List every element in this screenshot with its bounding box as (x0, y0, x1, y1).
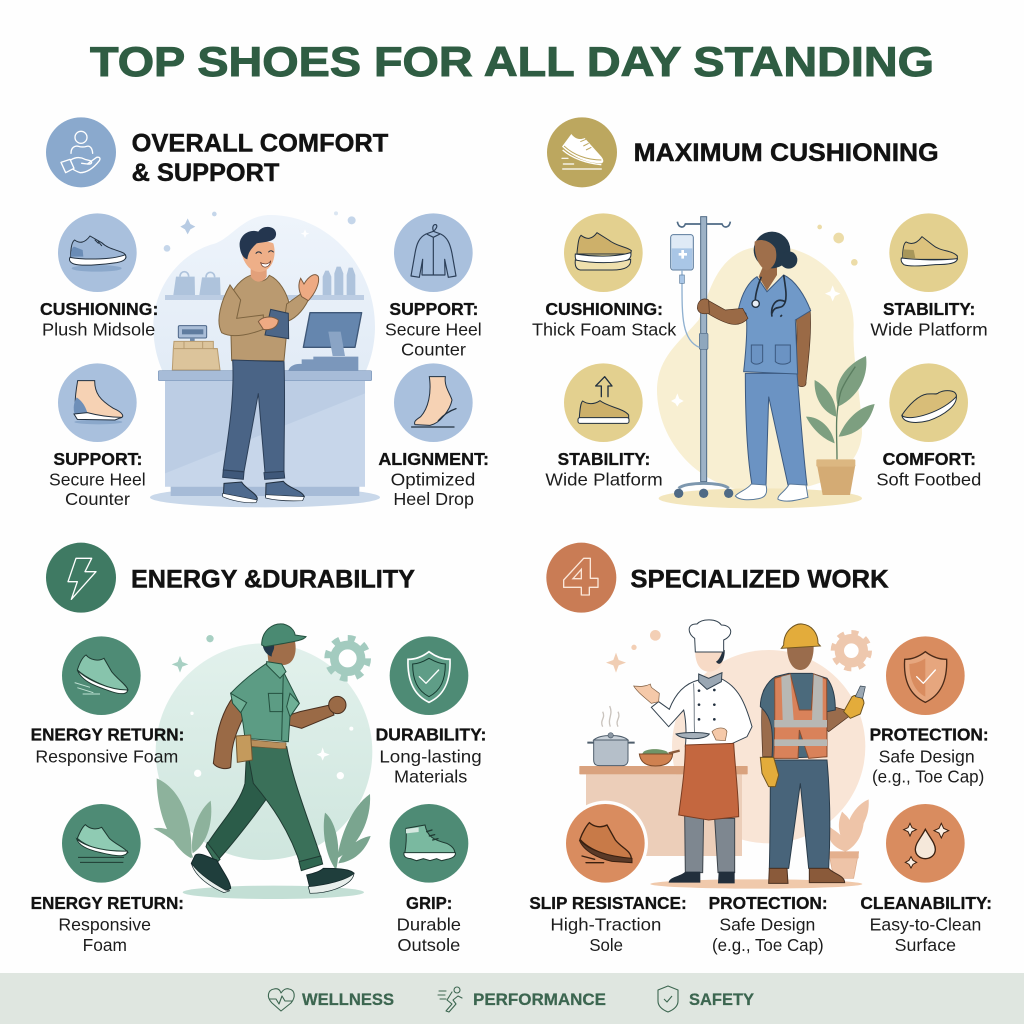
illustration: shop worker at counter (150, 211, 380, 507)
label: alignment: Optimized (391, 470, 475, 490)
label: durability: Long-lasting (379, 746, 482, 766)
label: support, left: SUPPORT: (53, 449, 142, 469)
label: protection, center: (e.g., Toe Cap) (712, 935, 824, 955)
label: protection: PROTECTION: (870, 725, 989, 745)
heading: ENERGY &DURABILITY (131, 565, 415, 593)
label: cleanability (860, 893, 992, 955)
icon: shield (658, 986, 678, 1012)
label: support, left: Secure Heel (49, 470, 146, 490)
panel: overall comfort and support (40, 117, 489, 509)
label: cushioning: CUSHIONING: (545, 299, 663, 319)
label: slip resistance: High-Traction (550, 915, 661, 935)
heading (132, 130, 389, 187)
heading: OVERALL COMFORT (132, 130, 389, 158)
label: cleanability: CLEANABILITY: (860, 893, 992, 913)
footer label: wellness: WELLNESS (302, 990, 394, 1009)
icon: plush midsole shoe (58, 213, 137, 292)
label: stability, left: Wide Platform (545, 470, 663, 490)
icon: wide platform shoe with arrow (564, 363, 643, 442)
label: energy return: Responsive Foam (35, 746, 178, 766)
illustration: walking worker (153, 624, 372, 899)
label: stability, left (545, 449, 663, 490)
label: stability: STABILITY: (883, 299, 975, 319)
icon: heel counter foot (58, 363, 137, 442)
icon: jacket on hanger (394, 213, 473, 292)
illustration: chef and construction worker (579, 620, 869, 889)
icon: person on open hand (46, 117, 116, 187)
label: support: Secure Heel (385, 320, 482, 340)
label: comfort: Soft Footbed (876, 470, 981, 490)
label: protection: (e.g., Toe Cap) (872, 767, 984, 787)
icon: slip resistant shoe (563, 801, 648, 886)
illustration: nurse with IV stand and plant (657, 217, 875, 508)
label: slip resistance: Sole (589, 935, 623, 955)
icon: cushioned running shoe (547, 117, 617, 187)
label: protection, center: Safe Design (719, 915, 815, 935)
label: support: Counter (401, 339, 466, 359)
label: cleanability: Easy-to-Clean (870, 915, 981, 935)
label: stability: Wide Platform (870, 320, 988, 340)
label: grip (397, 893, 461, 955)
footer label: safety: SAFETY (689, 990, 755, 1009)
label: energy return, lower: Foam (83, 935, 127, 955)
icon: heel drop foot (394, 363, 473, 442)
icon: heart rate (268, 989, 294, 1011)
label: cleanability: Surface (895, 935, 956, 955)
footer band (0, 973, 1024, 1024)
label: stability (870, 299, 988, 340)
label: cushioning: CUSHIONING: (40, 299, 158, 319)
icon: number four (546, 543, 616, 613)
label: support (385, 299, 482, 359)
label: cushioning (532, 299, 677, 340)
label: alignment: Heel Drop (393, 489, 474, 509)
icon: thick foam shoe (564, 213, 643, 292)
icon: clean drop with sparkles (886, 804, 965, 883)
icon: lightning bolt (46, 543, 116, 613)
heading: & SUPPORT (132, 159, 280, 187)
label: cushioning: Plush Midsole (42, 320, 155, 340)
label: grip: Outsole (397, 935, 460, 955)
icon: runner (438, 987, 462, 1012)
label: protection (870, 725, 989, 787)
label: slip resistance: SLIP RESISTANCE: (529, 893, 687, 913)
label: cushioning: Thick Foam Stack (532, 320, 677, 340)
label: grip: GRIP: (406, 893, 452, 913)
heading: MAXIMUM CUSHIONING (634, 139, 939, 167)
label: durability (376, 725, 486, 787)
label: energy return (31, 725, 184, 766)
panel: energy and durability (31, 543, 486, 955)
footer label: performance: PERFORMANCE (473, 990, 606, 1009)
label: support: SUPPORT: (389, 299, 478, 319)
label: protection, center: PROTECTION: (709, 893, 828, 913)
label: durability: Materials (394, 767, 467, 787)
panel: specialized work (529, 543, 992, 955)
label: stability, left: STABILITY: (558, 449, 650, 469)
label: cushioning (40, 299, 158, 340)
label: slip resistance (529, 893, 687, 955)
icon: check shield (390, 636, 468, 715)
label: comfort (876, 449, 981, 490)
label: support, left (49, 449, 146, 509)
icon: energy shoe with ground lines (62, 804, 141, 883)
label: protection: Safe Design (879, 746, 975, 766)
label: energy return: ENERGY RETURN: (31, 725, 184, 745)
label: comfort: COMFORT: (883, 449, 976, 469)
icon: soft footbed clog (889, 363, 968, 442)
label: durability: DURABILITY: (376, 725, 486, 745)
label: support, left: Counter (65, 489, 130, 509)
label: protection, center (709, 893, 828, 955)
label: energy return, lower (31, 893, 184, 955)
icon: stable shoe (889, 213, 968, 292)
label: alignment: ALIGNMENT: (378, 449, 489, 469)
icon: grip boot (390, 804, 468, 883)
label: energy return, lower: ENERGY RETURN: (31, 893, 184, 913)
icon: energy shoe (62, 636, 141, 715)
label: grip: Durable (397, 915, 461, 935)
label: energy return, lower: Responsive (58, 915, 151, 935)
panel: maximum cushioning (532, 117, 988, 508)
heading: SPECIALIZED WORK (630, 565, 889, 593)
label: alignment (378, 449, 489, 509)
title: TOP SHOES FOR ALL DAY STANDING (90, 38, 934, 85)
icon: shield with check (886, 636, 965, 715)
